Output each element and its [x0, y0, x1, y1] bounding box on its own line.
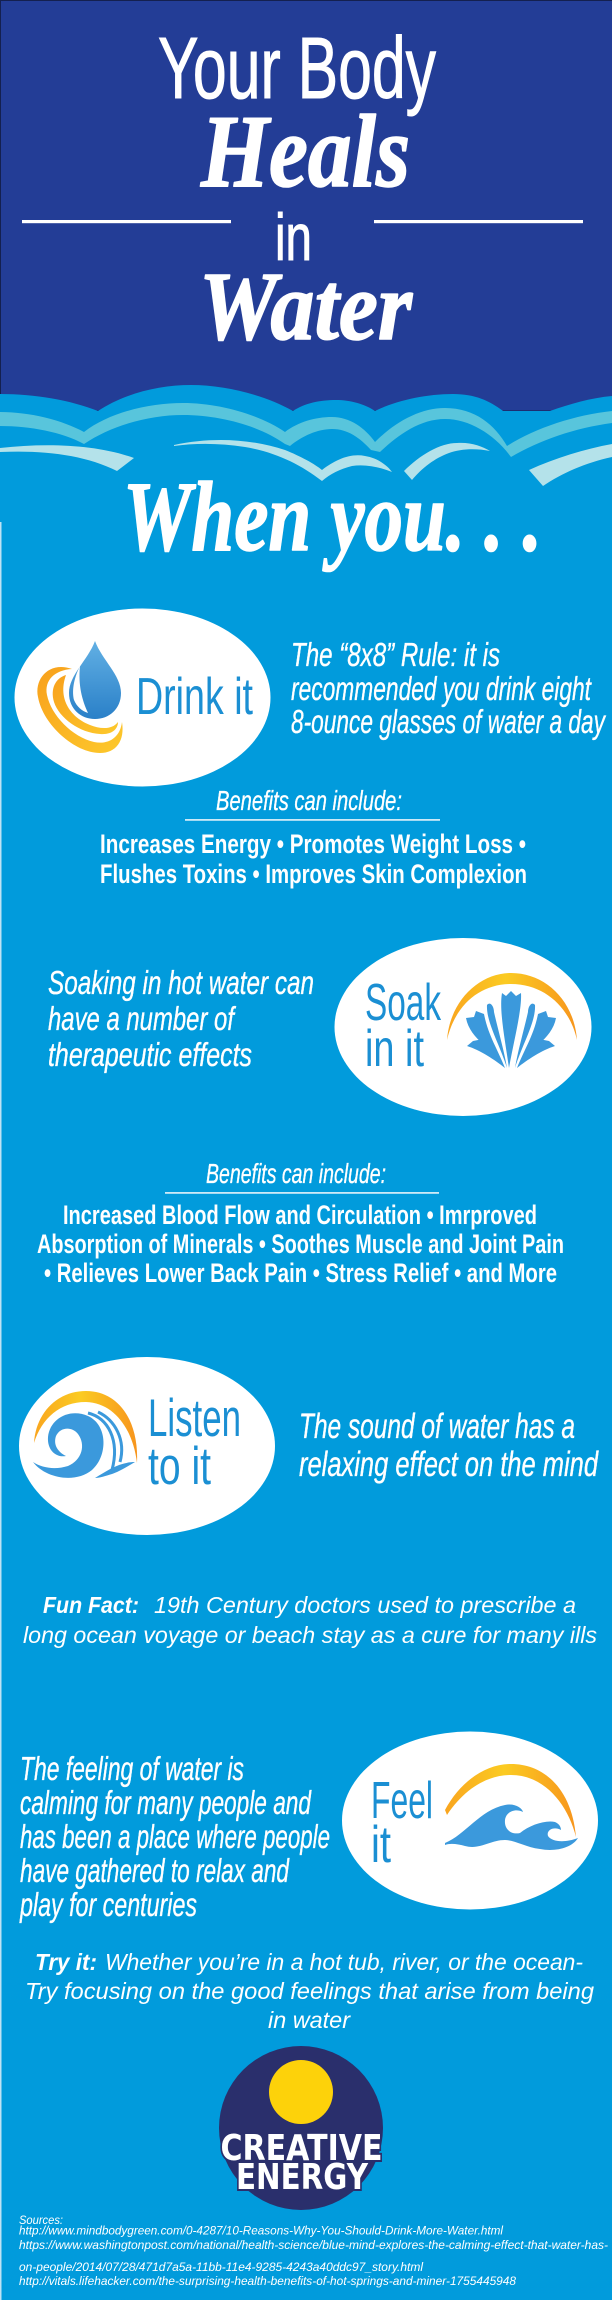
- waves divider: [0, 385, 612, 560]
- callout: try it: Whether you’re in a hot tub, river, or the ocean-: [105, 1949, 583, 1975]
- label: Feel it: it: [371, 1816, 391, 1874]
- badge: soak in it: [334, 938, 592, 1116]
- text: soaking: Soaking in hot water can: [48, 964, 314, 1001]
- text: feeling of water: play for centuries: [19, 1886, 197, 1923]
- text: 8x8 rule: [291, 636, 607, 740]
- sources: https://www.washingtonpost.com/national/health-science/blue-mind-explores-the-calming-effect-that-water-has-: [19, 2238, 608, 2252]
- text: feeling of water: has been a place where people: [20, 1818, 330, 1855]
- label: Feel it: [371, 1772, 433, 1874]
- label: Soak in it: [365, 974, 442, 1078]
- text: soaking: have a number of: [48, 1000, 237, 1037]
- title: Heals: Heals: [200, 94, 410, 209]
- label: Soak in it: in it: [365, 1020, 424, 1078]
- label: Drink it: Drink it: [136, 668, 253, 726]
- list: drink benefits: [100, 829, 527, 889]
- title: in: in: [275, 200, 312, 274]
- title: Your Body: Your Body: [158, 20, 436, 117]
- callout: try it: in water: [268, 2007, 351, 2033]
- panel: title header: [0, 0, 612, 412]
- label: Listen to it: Listen: [148, 1389, 241, 1448]
- heading: benefits: Benefits can include:: [206, 1158, 386, 1189]
- badge: listen to it: [19, 1357, 275, 1535]
- sources: on-people/2014/07/28/471d7a5a-11bb-11e4-9285-4243a40ddc97_story.html: [19, 2260, 423, 2274]
- title: Water: Water: [199, 253, 413, 361]
- text: soaking: [48, 964, 314, 1073]
- sources: http://www.mindbodygreen.com/0-4287/10-Reasons-Why-You-Should-Drink-More-Water.html: [19, 2224, 503, 2238]
- text: feeling of water: [19, 1750, 330, 1923]
- label: Listen to it: [148, 1389, 241, 1496]
- callout: fun fact: long ocean voyage or beach stay as a cure for many ills: [23, 1622, 597, 1648]
- sources: [19, 2213, 608, 2288]
- sources: http://vitals.lifehacker.com/the-surprising-health-benefits-of-hot-springs-and-miner-1755445948: [19, 2274, 516, 2288]
- callout: fun fact: [23, 1592, 597, 1648]
- text: 8x8 rule: The “8x8” Rule: it is: [291, 636, 500, 673]
- panel: feel it: [19, 1732, 598, 2033]
- panel: listen to it: [19, 1357, 599, 1648]
- list: soak benefits: [37, 1200, 564, 1288]
- callout: fun fact: 19th Century doctors used to prescribe a: [154, 1592, 576, 1618]
- panel: drink it: [14, 608, 607, 889]
- heading: benefits: Benefits can include:: [216, 785, 402, 816]
- logo: Creative Energy: [219, 2046, 383, 2210]
- callout: try it: [25, 1949, 594, 2033]
- badge: feel it: [342, 1732, 598, 1910]
- icon: water drop with orange ripples: [37, 641, 123, 753]
- badge: drink it: [14, 608, 270, 786]
- panel: soak in it: [37, 938, 592, 1288]
- callout: fun fact: Fun Fact:: [43, 1592, 139, 1618]
- text: feeling of water: The feeling of water is: [20, 1750, 244, 1787]
- label: Feel it: Feel: [371, 1772, 433, 1830]
- icon: wave with arc: [445, 1764, 578, 1850]
- text: feeling of water: have gathered to relax and: [20, 1852, 290, 1889]
- logo: Creative Energy: ENERGY: [236, 2157, 369, 2198]
- label: Soak in it: Soak: [365, 974, 442, 1032]
- icon: curling wave with arc: [33, 1391, 137, 1478]
- callout: try it: Try focusing on the good feelings that arise from being: [25, 1978, 594, 2004]
- label: Listen to it: to it: [148, 1437, 211, 1496]
- text: soaking: therapeutic effects: [48, 1036, 252, 1073]
- sources: Sources:: [19, 2213, 63, 2227]
- callout: try it: Try it:: [35, 1949, 97, 1975]
- text: feeling of water: calming for many people and: [20, 1784, 312, 1821]
- logo: Creative Energy: CREATIVE: [220, 2128, 382, 2169]
- text: sound of water: [299, 1407, 599, 1484]
- icon: fountain with arc: [447, 973, 577, 1068]
